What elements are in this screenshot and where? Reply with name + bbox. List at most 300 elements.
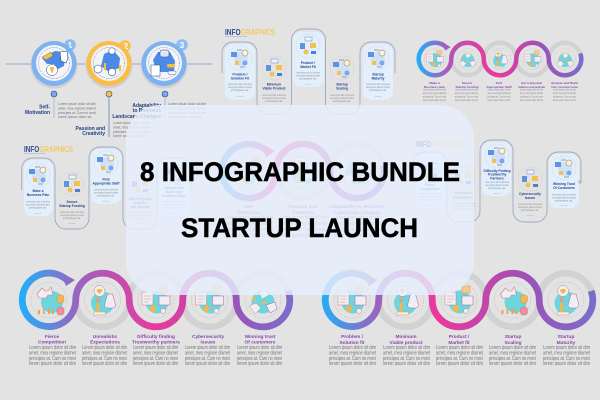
step text 2: Lorem ipsum dolor sit dim [113,121,151,125]
step: fierce competition: Lorem ipsum dolor sit dim [29,345,76,351]
grey rings [276,144,384,198]
step 5 text: amet, mea regione diamet [553,91,576,95]
card: startup scaling: mea regione diamet principes [330,97,355,100]
card: startup funding [59,172,85,226]
card: appropriate staff: principes at. [97,194,116,198]
step: winning trust: amet, mea regione diamet [237,350,282,356]
step title: passion: Creativity [82,131,105,137]
step: difficulty finding partners: lorem ipsum dolor sit dim [133,361,178,367]
step 2 text: Lorem ipsum dolor sit dim [455,88,478,92]
step text: passion: lorem ipsum dolor sit dim [280,233,327,239]
step 4 text: amet, mea regione diamet [520,91,543,95]
step 3 text [486,81,513,102]
step: problem solution fit: lorem ipsum dolor sit dim [329,361,376,367]
step text: self-motivation: principes at. Cum no movi [226,227,273,233]
card: business plan: Lorem ipsum dolor sit dim amet [26,200,50,204]
card: winning trust [549,154,579,208]
step: unrealistic expectations: Unrealistic [93,334,118,340]
card: customer base [159,160,189,216]
step: startup maturity: lorem ipsum dolor sit dim [543,361,590,367]
icon: expectations [84,282,120,318]
step text: self-motivation: amet, mea regione diamet [226,221,273,227]
step text: passion: Lorem ipsum dolor sit dim [280,215,327,221]
step 3 text: Lorem ipsum dolor sit dim [488,88,511,92]
step text: self-motivation: lorem ipsum dolor sit dim [226,233,273,239]
card: startup maturity: Maturity [372,76,385,80]
icon: motivation circle [30,41,78,88]
icons [424,48,576,70]
step 3 text: Find [496,81,502,85]
card: problem solution fit: Lorem ipsum dolor sit dim amet [228,83,252,86]
card: unrealistic expectations: mea regione diamet principes [451,205,476,208]
step text 2: principes at. Cum no movi [113,130,151,134]
step 2 text [455,81,479,102]
card: minimum viable product [262,56,287,110]
icon: maturity [548,282,584,318]
step text: self-motivation [226,204,273,239]
icon: winning trust [245,282,281,318]
step title: self-motivation: Self- [39,104,50,110]
step: startup maturity: Startup [558,334,574,340]
card: physical address: and Website [130,205,150,209]
card: customer base: Customer Base [162,194,186,198]
step 5 text: Analyze and Build [551,81,578,85]
card: startup funding: • • • • • [69,224,75,226]
infographic 6: startup risks cards [413,140,581,222]
icon: problem solution [334,282,370,318]
step: startup scaling: amet, mea regione diamet [489,350,536,356]
step title: self-motivation [25,104,50,116]
step: fierce competition [29,334,76,367]
step text 2: lorem ipsum dolor sit. [113,134,147,138]
step: startup scaling: principes at. Cum no movi [489,356,536,362]
card: minimum viable product: Lorem ipsum dolor sit dim amet [262,94,286,97]
icon: cybersecurity [192,282,228,318]
step: winning trust: lorem ipsum dolor sit dim [237,361,282,367]
card: startup maturity: Startup [372,72,384,76]
card: startup funding: Lorem ipsum dolor sit dim amet [60,211,84,214]
card: startup funding: Startup Funding [59,204,85,208]
step: difficulty finding partners: amet, mea regione diamet [133,350,178,356]
card: startup scaling: Scaling [336,86,348,90]
card: product market fit: Lorem ipsum dolor sit dim amet [296,72,320,74]
card: problem solution fit: mea regione diamet principes [228,86,253,89]
card: cybersecurity issues: • • • • • [527,216,533,218]
icons [231,153,375,189]
card: unrealistic expectations: Lorem ipsum dolor sit dim amet [451,202,475,205]
infographic 5: center serpentine behind panel [222,143,385,239]
card: trustworthy partners: • • • • • [494,194,500,196]
step: cybersecurity issues: amet, mea regione diamet [185,350,230,356]
card: trustworthy partners: Trustworthy [488,172,507,176]
step text: self-motivation: Motivation [237,210,261,216]
card: winning trust: Lorem ipsum dolor sit dim amet [552,194,576,196]
step text 1: Lorem ipsum dolor sit dim [58,102,96,106]
step: startup scaling: lorem ipsum dolor sit dim [489,361,536,367]
step: startup scaling [489,334,536,367]
badge 1 [64,39,76,51]
step text 3: amet, mea regione diamet [168,106,206,110]
step: unrealistic expectations: Lorem ipsum dolor sit dim [82,345,127,351]
card: physical address: Lorem ipsum dolor sit dim amet [128,211,152,214]
card: unrealistic expectations: Expectations [453,196,473,200]
step text: passion: Passion and [289,204,317,210]
card: cybersecurity issues: Lorem ipsum dolor sit dim amet [518,203,542,206]
card: trustworthy partners: Partners [490,176,504,180]
card: winning trust: Of Customers [553,186,575,190]
step 5 text: principes at. Cum no movi [553,94,576,98]
step: winning trust: Lorem ipsum dolor sit dim [237,345,282,351]
step: winning trust [237,334,282,367]
card: appropriate staff: Find [103,178,109,182]
translucent title panel [126,105,474,295]
card: appropriate staff: • • • • • [103,201,109,203]
step: cybersecurity issues: Lorem ipsum dolor sit dim [185,345,230,351]
card: trustworthy partners: principes at. [488,187,507,190]
icon: scaling [494,282,530,318]
step: product market fit: amet, mea regione diamet [436,350,483,356]
card: business plan: mea regione diamet principes [26,204,51,206]
card: startup maturity: Lorem ipsum dolor sit dim amet [366,83,390,86]
step: fierce competition: Fierce [45,334,59,340]
card: problem solution fit: • • • • • [237,96,243,98]
step: winning trust: Winning trust [245,334,276,340]
card: winning trust: principes at. [555,200,574,202]
step text 3: lorem ipsum dolor sit. [168,115,202,119]
step: cybersecurity issues [185,334,230,367]
card: problem solution fit: Solution Fit [231,76,250,80]
card: minimum viable product: mea regione diamet principes [262,97,287,100]
step 5 text: lorem ipsum dolor sit dim [553,98,576,102]
card: product market fit: Market Fit [300,65,317,69]
step: problem solution fit: Solution fit [339,340,365,346]
card: physical address [128,172,153,226]
card: startup funding: mea regione diamet principes [60,214,85,217]
step text 2: amet, mea regione diamet [113,126,151,130]
infographic 7: startup challenges serpentine [22,272,290,367]
step text 3: principes at. Cum no movi [168,111,206,115]
connector 3 [162,91,168,118]
step: difficulty finding partners: principes at. Cum no movi [133,356,178,362]
step text: passion: amet, mea regione diamet [280,221,327,227]
step: product market fit: Product / [449,334,470,340]
step title: adaptability: Landscape Changes [112,114,161,120]
connector 2 [106,91,112,137]
card: fierce competition: Lorem ipsum dolor sit dim amet [418,192,442,196]
step 1 text: Lorem ipsum dolor sit dim [423,88,446,92]
icon: product market [441,282,477,318]
grey rings [451,43,581,75]
card: startup funding: principes at. [63,217,82,220]
step: cybersecurity issues: principes at. Cum no movi [185,356,230,362]
step: startup maturity: Lorem ipsum dolor sit dim [543,345,590,351]
ribbon [22,272,290,327]
connector outline [222,29,395,114]
icon: adaptability circle [140,41,188,88]
step 4 text: Lorem ipsum dolor sit dim [520,88,543,92]
card: physical address: Get a Physical [129,197,151,201]
title line 1: 8 INFOGRAPHIC BUNDLE [140,157,460,187]
step: problem solution fit: principes at. Cum no movi [329,356,376,362]
card: business plan: • • • • • [35,214,41,216]
card: startup funding: Secure [66,200,78,204]
card: minimum viable product: principes at. [265,100,284,103]
step text 1: principes at. Cum no movi [58,111,96,115]
card: fierce competition: mea regione diamet principes [418,196,443,198]
badge 1: 1 [68,41,73,50]
card: physical address: • • • • • [137,224,143,226]
step title: passion [76,126,105,137]
step: cybersecurity issues: Cybersecurity [192,334,224,340]
card: customer base: Build Your [166,190,183,194]
step: cybersecurity issues: Issues [201,340,216,346]
step: startup scaling: Startup [505,334,521,340]
step: difficulty finding partners: Difficulty finding [137,334,175,340]
card: appropriate staff [91,149,121,204]
step 2 text: principes at. Cum no movi [455,94,478,98]
infographic 4: business launch cards [22,145,191,229]
ribbon [419,42,581,75]
step: startup maturity: Maturity [557,340,576,346]
step text: adaptability: Lorem ipsum dolor sit dim [334,215,381,221]
step: startup maturity [543,334,590,367]
step title: adaptability [112,103,161,120]
step: minimum viable product: Lorem ipsum dolor sit dim [383,345,430,351]
card: appropriate staff: Lorem ipsum dolor sit dim amet [94,188,118,192]
card: cybersecurity issues: Cybersecurity [519,192,541,196]
step 4 text: Get a physical [521,81,542,85]
step 1 text: amet, mea regione diamet [423,91,446,95]
step: product market fit: Lorem ipsum dolor sit dim [436,345,483,351]
card: winning trust: • • • • • [561,206,567,208]
step: problem solution fit [329,334,376,367]
step 3 text: lorem ipsum dolor sit dim [488,98,511,102]
step text 3 [168,102,206,119]
card: customer base: principes at. [165,206,184,210]
infographic 3: small serpentine business steps [419,42,581,102]
card: problem solution fit: Problem / [232,72,248,76]
step 4 text: principes at. Cum no movi [520,94,543,98]
step text: adaptability: Adaptability to Business [329,204,385,210]
grey rings [379,273,593,327]
title line 2: STARTUP LAUNCH [181,213,418,243]
badge 2: 2 [124,42,129,51]
step 5 text [551,81,578,102]
step 5 text: Your customer base [551,85,578,89]
step: fierce competition: principes at. Cum no movi [29,356,76,362]
icon: competition [31,282,67,318]
step: fierce competition: lorem ipsum dolor sit dim [29,361,76,367]
step 2 text: Secure [462,81,472,85]
step 1 text: principes at. Cum no movi [423,94,446,98]
step text: adaptability [329,204,385,239]
step: unrealistic expectations: amet, mea regione diamet [82,350,127,356]
card: cybersecurity issues: mea regione diamet principes [518,206,543,209]
step: minimum viable product: Minimum [395,334,417,340]
step: startup maturity: principes at. Cum no movi [543,356,590,362]
card: business plan: Make a [32,189,44,193]
step: startup scaling: Scaling [504,340,522,346]
card: cybersecurity issues [518,167,543,218]
step text: passion: Creativity [292,210,314,216]
step: minimum viable product: lorem ipsum dolor sit dim [383,361,430,367]
card: product market fit: • • • • • [305,84,311,86]
card: product market fit [293,32,324,87]
badge 3 [176,39,188,51]
step text: passion: principes at. Cum no movi [280,227,327,233]
card: trustworthy partners [482,142,511,196]
step text 1: amet, mea regione diamet [58,106,96,110]
step text: adaptability: amet, mea regione diamet [334,221,381,227]
step title: adaptability: to Business [133,108,161,114]
connector outline [413,140,581,222]
card: unrealistic expectations: Unrealistic [455,191,472,195]
step: fierce competition: Competition [38,340,66,346]
infographic 2: startup stages cards [222,28,395,114]
connector outline [22,147,191,229]
step: unrealistic expectations [82,334,127,367]
icon: passion circle [86,41,132,88]
step: minimum viable product [383,334,430,367]
end dot [579,181,581,183]
card: minimum viable product: Viable Product [262,86,286,90]
infographic 8: startup stages serpentine [325,272,593,367]
step text 2 [113,121,151,138]
card: customer base: Lorem ipsum dolor sit dim amet [162,200,186,204]
ribbon [222,143,384,198]
step: cybersecurity issues: lorem ipsum dolor sit dim [185,361,230,367]
step text: adaptability: principes at. Cum no movi [334,227,381,233]
step: unrealistic expectations: Expectations [90,340,120,346]
step title: self-motivation: Motivation [25,110,50,116]
card: customer base: Analyze and [164,186,184,190]
step: winning trust: Of customers [245,340,276,346]
card: startup scaling: • • • • • [339,108,345,110]
step 4 text [518,81,545,102]
step: minimum viable product: amet, mea regione diamet [383,350,430,356]
card: appropriate staff: mea regione diamet principes [94,192,119,194]
step: problem solution fit: Problem / [341,334,364,340]
step title: passion: Passion and [76,126,105,132]
card: startup maturity [363,44,393,100]
step 2 text: Startup funding [455,85,479,89]
step: unrealistic expectations: principes at. Cum no movi [82,356,127,362]
card: minimum viable product: • • • • • [271,108,277,110]
step: fierce competition: amet, mea regione diamet [29,350,76,356]
card: customer base: • • • • • [171,214,177,216]
card: winning trust: Winning Trust [553,182,576,186]
card: physical address: principes at. [131,217,150,220]
card: trustworthy partners: Difficulty Finding [484,169,510,173]
icon: minimum viable product [388,282,424,318]
step: product market fit: lorem ipsum dolor sit dim [436,361,483,367]
icon: partners [138,282,174,318]
step 2 text: lorem ipsum dolor sit dim [455,98,478,102]
step: difficulty finding partners: Trustworthy partners [132,340,180,346]
step: product market fit: principes at. Cum no movi [436,356,483,362]
step: problem solution fit: amet, mea regione diamet [329,350,376,356]
step 1 text: Make a [429,81,440,85]
card: cybersecurity issues: principes at. [521,209,540,212]
badge 3: 3 [180,41,185,50]
step 1 text [423,81,446,102]
step: startup maturity: amet, mea regione diamet [543,350,590,356]
step: difficulty finding partners [132,334,180,367]
card: unrealistic expectations: • • • • • [460,216,466,218]
card: product market fit: principes at. [299,78,318,80]
card: fierce competition: Fierce [425,183,435,187]
card: fierce competition: Competition [420,187,440,191]
step text: adaptability: lorem ipsum dolor sit dim [334,233,381,239]
card: startup scaling: Lorem ipsum dolor sit dim amet [330,94,354,97]
logo: INFOGRAPHICS [416,140,465,149]
connector 1 [51,91,57,118]
card: fierce competition: principes at. [421,198,440,202]
card: minimum viable product: Minimum [267,82,281,86]
step: product market fit [436,334,483,367]
card: product market fit: mea regione diamet principes [296,74,321,78]
step text: self-motivation: Lorem ipsum dolor sit dim [226,215,273,221]
step 4 text: lorem ipsum dolor sit dim [520,98,543,102]
step text 1 [58,102,96,119]
card: physical address: Address [133,201,147,205]
step title: adaptability: Adaptability [132,103,161,109]
card: trustworthy partners: mea regione diamet principes [485,184,510,187]
step text 3: Lorem ipsum dolor sit dim [168,102,206,106]
card: startup maturity: principes at. [369,89,388,92]
card: startup maturity: mea regione diamet principes [366,86,391,89]
card: fierce competition: • • • • • [427,205,433,207]
card: startup scaling: principes at. [333,100,352,103]
card: unrealistic expectations: principes at. [454,208,473,211]
badge 2 [119,40,131,52]
step 1 text: lorem ipsum dolor sit dim [423,98,446,102]
card: business plan: principes at. [29,206,48,210]
grey rings [76,273,290,327]
logo: INFOGRAPHICS [225,28,276,37]
card: startup maturity: • • • • • [375,96,381,98]
step: winning trust: principes at. Cum no movi [237,356,282,362]
step text 1: lorem ipsum dolor sit. [58,115,92,119]
card: winning trust: mea regione diamet principes [552,196,577,200]
card: physical address: mea regione diamet principes [128,214,153,217]
step: unrealistic expectations: lorem ipsum dolor sit dim [82,361,127,367]
infographic 1: circular timeline [6,39,212,138]
card: trustworthy partners: Lorem ipsum dolor sit dim amet [485,181,509,184]
step 4 text: Address and website [518,85,545,89]
step text: adaptability: Landscape changes [334,210,380,216]
step text: self-motivation: Self- [244,204,255,210]
step: difficulty finding partners: Lorem ipsum dolor sit dim [133,345,178,351]
card: problem solution fit: principes at. [231,89,250,92]
card: startup scaling [330,56,355,110]
step: product market fit: Market fit [448,340,470,346]
step 2 text: amet, mea regione diamet [455,91,478,95]
card: problem solution fit [225,44,255,100]
card: business plan [24,160,53,216]
step: problem solution fit: Lorem ipsum dolor sit dim [329,345,376,351]
ribbon [325,272,593,327]
card: appropriate staff: Appropriate Staff [93,182,120,186]
step: minimum viable product: principes at. Cum no movi [383,356,430,362]
step 1 text: Business plan [424,85,445,89]
card: cybersecurity issues: Issues [525,196,535,200]
logo: INFOGRAPHICS [24,145,74,154]
card: business plan: Business Plan [27,193,49,197]
step 3 text: Appropriate Staff [486,85,513,89]
step 5 text: Lorem ipsum dolor sit dim [553,88,576,92]
card: product market fit: Product / [301,61,315,65]
